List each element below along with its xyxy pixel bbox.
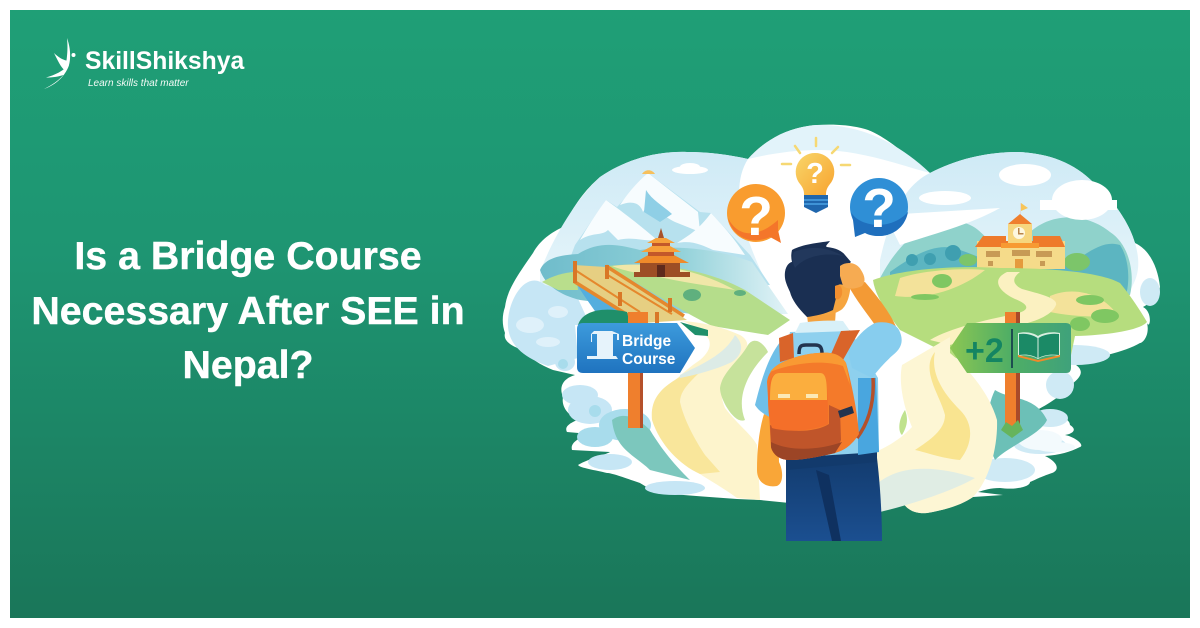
right path inner xyxy=(915,352,970,460)
right torso shade xyxy=(858,378,879,455)
backpack body xyxy=(767,353,859,460)
left hill bush xyxy=(683,289,746,301)
right sleeve xyxy=(848,322,902,378)
hair xyxy=(785,241,851,317)
left sleeve xyxy=(755,340,790,418)
plus two sign xyxy=(950,323,1071,373)
pale sky, centre xyxy=(748,125,930,173)
title: Is a Bridge Course xyxy=(74,234,422,278)
left lower cloud shadow xyxy=(558,359,651,447)
logo mark: leaping figure xyxy=(44,38,76,89)
bushes near school xyxy=(959,253,1090,271)
temple xyxy=(634,228,690,277)
left path xyxy=(653,321,760,500)
school road xyxy=(930,272,1056,345)
blue question bubble xyxy=(850,177,908,239)
small green slope left of bridge xyxy=(542,272,578,290)
brand name: SkillShikshya xyxy=(85,48,244,75)
sign label: +2 xyxy=(965,332,1004,370)
zipper pulls xyxy=(778,394,818,398)
torso shirt xyxy=(770,330,879,458)
right lower cloud white xyxy=(1018,430,1075,452)
pale sky, left xyxy=(540,152,770,290)
right arm raised xyxy=(848,282,897,329)
right cloud cluster xyxy=(975,278,1160,482)
right path pale end xyxy=(878,469,975,512)
ear xyxy=(835,285,842,299)
backpack bottom xyxy=(771,442,842,460)
blue question bubble: ? xyxy=(862,177,896,239)
cloud backdrop xyxy=(503,125,1160,513)
right signpost xyxy=(1001,312,1023,438)
left signpost xyxy=(628,312,708,428)
left cloud cluster xyxy=(508,280,705,495)
left lower bushes xyxy=(612,416,690,480)
left path grey shade xyxy=(680,335,741,378)
school xyxy=(975,203,1065,269)
collar xyxy=(795,321,850,333)
sign label: Bridge xyxy=(622,333,671,350)
distant trees right xyxy=(880,217,1132,295)
tagline: Learn skills that matter xyxy=(88,78,189,89)
sign label 2: Course xyxy=(622,351,676,368)
bridge xyxy=(573,261,687,324)
left green verge xyxy=(720,341,768,421)
student xyxy=(755,241,902,541)
lightbulb idea icon xyxy=(782,138,850,213)
hair highlight xyxy=(793,248,843,268)
trouser fold xyxy=(816,470,841,541)
backpack upper flap xyxy=(770,353,850,385)
orange question bubble xyxy=(727,184,785,247)
title: Nepal? xyxy=(182,343,314,387)
right hill xyxy=(873,267,1147,360)
backpack straps xyxy=(779,330,860,362)
right path xyxy=(873,337,997,513)
left arm xyxy=(757,414,782,486)
left cloud highlights xyxy=(516,306,568,347)
trousers xyxy=(786,450,882,541)
water under bridge xyxy=(578,286,640,322)
backpack handle xyxy=(799,345,822,354)
bridge course sign xyxy=(577,323,695,373)
face xyxy=(816,276,851,315)
side strap xyxy=(838,406,854,418)
right hill sand patches xyxy=(895,269,1117,316)
right hill green patches xyxy=(911,274,1119,331)
white clouds right xyxy=(885,164,1117,245)
lightbulb idea icon: ? xyxy=(806,158,824,190)
backpack lower shade xyxy=(770,405,841,460)
right path sliver of green xyxy=(899,410,907,435)
book icon xyxy=(1018,332,1060,362)
bridge icon xyxy=(587,331,619,359)
backpack pocket top xyxy=(770,373,827,400)
right lower bushes xyxy=(988,390,1047,460)
small clouds left xyxy=(672,163,708,174)
orange question bubble: ? xyxy=(739,185,773,247)
hand on head xyxy=(840,263,865,289)
brown strap under arm xyxy=(857,378,873,438)
title xyxy=(31,234,465,387)
distant trees left xyxy=(540,245,788,315)
neck xyxy=(806,308,836,323)
left path inner xyxy=(652,362,720,474)
left hill highlight xyxy=(612,264,735,290)
distant trees right, darker xyxy=(890,244,1128,298)
waist shadow xyxy=(786,450,877,470)
tree row left of school xyxy=(906,245,961,266)
title: Necessary After SEE in xyxy=(31,288,465,332)
mountains xyxy=(560,170,770,285)
left hill xyxy=(608,264,790,335)
dark bush behind bridge sign xyxy=(578,310,630,325)
pale sky, right xyxy=(880,152,1138,290)
backpack front pocket xyxy=(768,374,828,431)
